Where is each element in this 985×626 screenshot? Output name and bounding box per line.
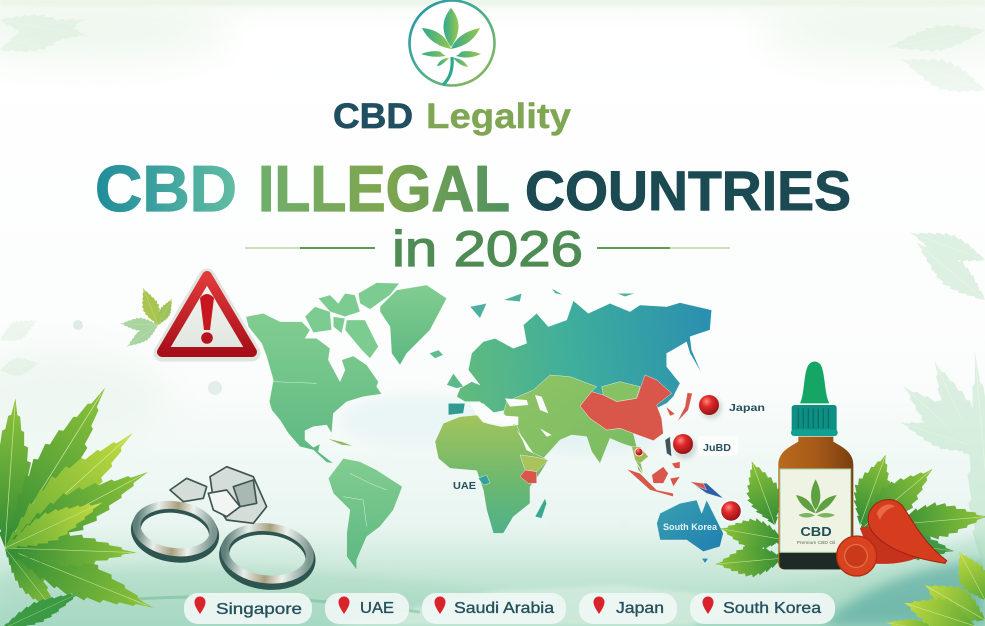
dropper bulb xyxy=(800,361,829,403)
warning sign xyxy=(120,276,252,353)
marker: JuBD xyxy=(673,434,696,459)
label: Japan: Japan xyxy=(729,402,765,414)
British Isles xyxy=(447,373,463,388)
red capsules xyxy=(837,500,947,576)
map markers xyxy=(635,395,742,522)
pill: Singapore xyxy=(184,593,312,624)
pill: Singapore: Singapore xyxy=(216,601,302,618)
pill: Saudi Arabia xyxy=(422,593,566,624)
Caribbean xyxy=(327,438,353,446)
Japan xyxy=(677,393,692,422)
Kenya xyxy=(520,470,537,483)
title: ILLEGAL xyxy=(258,152,510,225)
title: CBD xyxy=(95,152,237,225)
label: JuBD xyxy=(698,436,738,456)
Borneo xyxy=(652,467,668,483)
CBD scene leaves xyxy=(714,448,985,626)
label: JuBD: JuBD xyxy=(703,442,731,454)
Thailand and Indochina xyxy=(632,447,648,463)
Arctic archipelagos xyxy=(470,288,635,318)
map: Americas and Greenland xyxy=(246,283,447,570)
Mongolia xyxy=(602,382,640,402)
label: UAE: UAE xyxy=(453,480,476,492)
marker: Southeast Asia xyxy=(635,448,643,456)
title xyxy=(95,152,851,225)
label leaf xyxy=(796,479,837,518)
logo wordmark: Legality xyxy=(426,97,572,136)
logo wordmark xyxy=(333,97,572,136)
subtitle: in 2026 xyxy=(392,221,583,277)
Africa xyxy=(435,415,548,533)
logo icon xyxy=(410,0,494,86)
logo wordmark: CBD xyxy=(333,97,413,136)
China xyxy=(580,375,672,441)
Gulf of Guinea accent xyxy=(478,475,490,485)
map: Eurasia, Africa, Oceania xyxy=(435,288,723,563)
pill: Saudi Arabia: Saudi Arabia xyxy=(454,600,554,617)
Australia xyxy=(657,500,723,552)
Iceland xyxy=(429,350,443,358)
world map xyxy=(246,283,723,570)
bottle label: Premium CBD Oil xyxy=(797,540,835,545)
bottle cap xyxy=(791,405,838,436)
pill: South Korea: South Korea xyxy=(723,600,821,617)
small leaf behind sign xyxy=(120,285,178,352)
bottle base xyxy=(779,550,853,569)
handcuffs xyxy=(133,467,313,589)
South America xyxy=(328,458,402,570)
Horn of Africa xyxy=(520,455,548,472)
bottle body xyxy=(778,437,853,569)
pill: Japan xyxy=(579,593,677,624)
seas xyxy=(470,342,697,453)
Philippines xyxy=(665,437,672,457)
Madagascar xyxy=(535,498,547,518)
marker: Japan xyxy=(699,395,722,419)
marker: South Korea xyxy=(720,500,742,522)
Iberia xyxy=(448,403,465,415)
New Guinea xyxy=(690,482,723,498)
pill: Japan: Japan xyxy=(616,600,664,617)
title: COUNTRIES xyxy=(525,159,851,222)
Arctic islands xyxy=(305,283,399,358)
pill: UAE xyxy=(325,593,409,624)
North America xyxy=(246,313,382,463)
country pills xyxy=(184,593,835,624)
Greenland xyxy=(380,285,447,365)
cuff ring: right xyxy=(221,523,313,589)
Korea xyxy=(666,407,675,416)
map labels xyxy=(453,402,765,533)
Sumatra and Java xyxy=(627,469,673,497)
pale background leaves: right side xyxy=(891,220,985,626)
pill: UAE: UAE xyxy=(360,600,394,617)
cannabis leaf: bottom left xyxy=(0,375,161,626)
Middle East, Central and South Asia xyxy=(503,375,643,473)
CBD bottle xyxy=(778,361,853,569)
Sulawesi xyxy=(670,477,680,487)
bottle label xyxy=(780,469,851,552)
label: South Korea: South Korea xyxy=(663,522,718,533)
cuff ring: left xyxy=(133,500,217,563)
Tasmania xyxy=(702,558,708,563)
Eurasia xyxy=(457,301,712,417)
cuff chain xyxy=(170,467,267,523)
pale background leaves: top corners and left edge xyxy=(0,5,985,380)
bottle label: CBD xyxy=(800,524,832,539)
pill: South Korea xyxy=(690,593,835,624)
